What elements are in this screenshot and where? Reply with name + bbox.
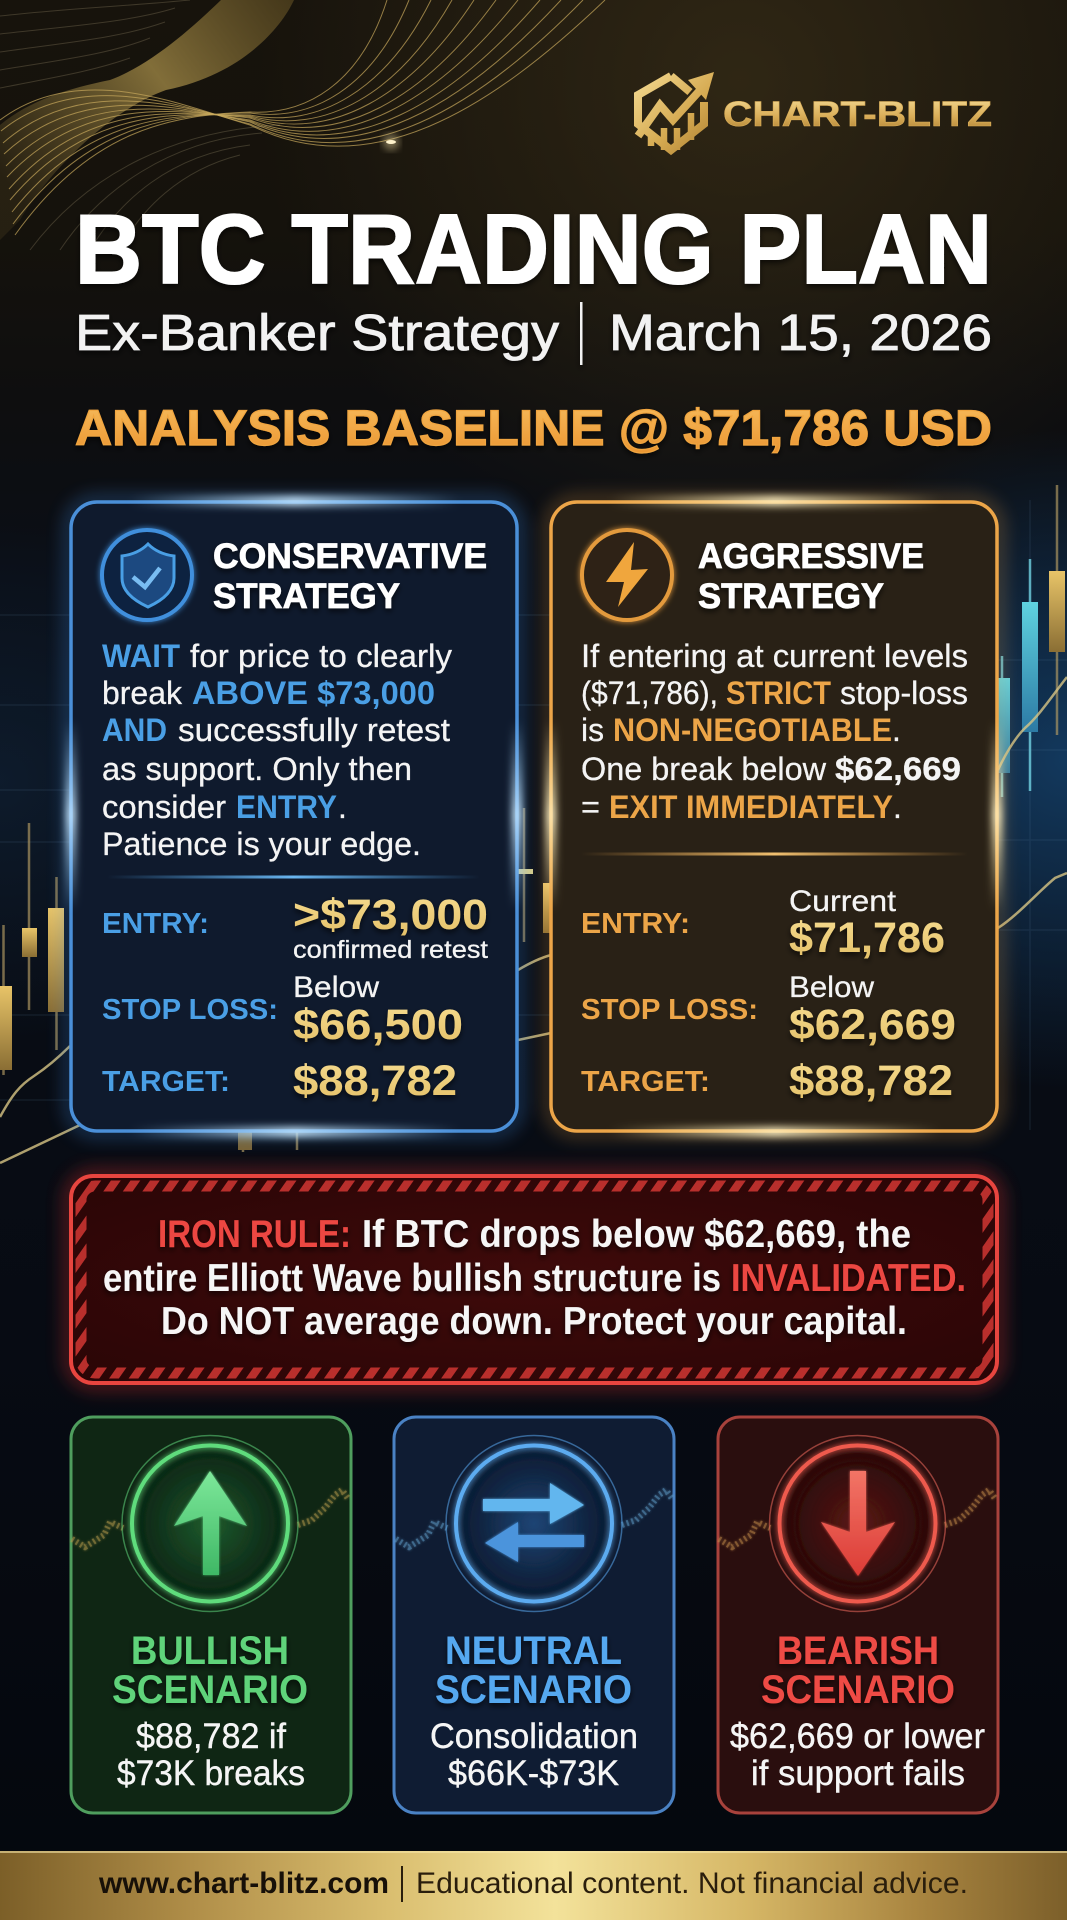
- body text: for price to clearly: [190, 638, 452, 674]
- panel: bearish scenario: [718, 1417, 998, 1813]
- heading: STRATEGY: [698, 577, 884, 616]
- panel: neutral scenario: [394, 1417, 674, 1813]
- description: [730, 1717, 985, 1793]
- decorative gold wave ribbons: [0, 0, 605, 250]
- description: $62,669 or lower: [730, 1717, 985, 1756]
- body text: Patience is your edge.: [102, 826, 421, 862]
- warning text: IRON RULE:: [158, 1213, 351, 1256]
- heading: STRATEGY: [213, 577, 400, 616]
- body text: ($71,786),: [581, 675, 718, 711]
- entry, stop loss, target rows: $66,500: [293, 1001, 463, 1049]
- body text: =: [581, 789, 600, 825]
- disclaimer: Educational content. Not financial advice.: [416, 1867, 968, 1900]
- icon: swap arrows in ring: [446, 1436, 622, 1612]
- label: [112, 1629, 308, 1712]
- entry, stop loss, target rows: ENTRY:: [102, 908, 209, 940]
- label: SCENARIO: [761, 1668, 955, 1712]
- label: BEARISH: [777, 1629, 939, 1673]
- panel: iron rule warning: [70, 1175, 998, 1384]
- title block: [75, 194, 992, 456]
- body text: .: [893, 789, 902, 825]
- mini chart: [72, 1490, 349, 1547]
- entry, stop loss, target rows: ENTRY:: [581, 908, 690, 940]
- panel: bullish scenario: [71, 1417, 351, 1813]
- heading: AGGRESSIVE: [698, 537, 924, 576]
- icon: up arrow in ring: [122, 1436, 298, 1612]
- entry, stop loss, target rows: [581, 885, 956, 1105]
- entry, stop loss, target rows: TARGET:: [581, 1066, 710, 1098]
- entry, stop loss, target rows: TARGET:: [102, 1066, 230, 1098]
- entry, stop loss, target rows: STOP LOSS:: [102, 994, 278, 1026]
- body text: EXIT IMMEDIATELY: [609, 789, 893, 825]
- body text: is: [581, 712, 604, 748]
- entry, stop loss, target rows: STOP LOSS:: [581, 994, 758, 1026]
- description: [117, 1717, 305, 1793]
- icon: down arrow in ring: [770, 1436, 946, 1612]
- label: [761, 1629, 955, 1712]
- panel: conservative strategy: [66, 496, 522, 1137]
- heading: CONSERVATIVE: [213, 537, 487, 576]
- panel: aggressive strategy: [546, 496, 1002, 1137]
- body text: [581, 638, 968, 825]
- title: BTC TRADING PLAN: [75, 194, 992, 304]
- entry, stop loss, target rows: $62,669: [789, 1001, 956, 1049]
- subtitle: March 15, 2026: [609, 304, 992, 361]
- description: [430, 1717, 638, 1793]
- icon: shield check: [102, 530, 192, 620]
- entry, stop loss, target rows: $88,782: [789, 1057, 953, 1105]
- description: $73K breaks: [117, 1754, 305, 1793]
- subtitle: Ex-Banker Strategy: [75, 304, 560, 361]
- icon: shield with rising arrow: [638, 72, 714, 150]
- label: SCENARIO: [435, 1668, 632, 1712]
- description: if support fails: [751, 1754, 965, 1793]
- body text: stop-loss: [840, 675, 968, 711]
- icon: lightning bolt: [582, 530, 672, 620]
- body text: ENTRY: [236, 789, 337, 825]
- body text: .: [338, 789, 347, 825]
- mini chart: [396, 1490, 673, 1547]
- entry, stop loss, target rows: $71,786: [789, 914, 945, 962]
- body text: [102, 638, 452, 862]
- label: NEUTRAL: [445, 1629, 622, 1673]
- entry, stop loss, target rows: $88,782: [293, 1057, 457, 1105]
- entry, stop loss, target rows: >$73,000: [293, 891, 488, 939]
- label: BULLISH: [131, 1629, 289, 1673]
- body text: If entering at current levels: [581, 638, 968, 674]
- logo wordmark: CHART-BLITZ: [723, 95, 992, 134]
- body text: .: [892, 712, 901, 748]
- body text: One break below: [581, 751, 827, 787]
- body text: break: [102, 675, 183, 711]
- warning text: Do NOT average down. Protect your capital.: [161, 1300, 907, 1343]
- heading: [213, 537, 487, 616]
- body text: STRICT: [726, 675, 831, 711]
- warning text: [103, 1213, 966, 1343]
- mini chart: [719, 1490, 996, 1547]
- body text: $62,669: [835, 751, 961, 787]
- warning text: entire Elliott Wave bullish structure is: [103, 1257, 721, 1300]
- label: [435, 1629, 632, 1712]
- logo: Chart-Blitz: [638, 72, 992, 150]
- description: $66K-$73K: [448, 1754, 619, 1793]
- background candlesticks and trend lines: [0, 485, 1067, 1163]
- body text: AND: [102, 712, 167, 748]
- label: SCENARIO: [112, 1668, 308, 1712]
- body text: successfully retest: [178, 712, 450, 748]
- warning text: If BTC drops below $62,669, the: [362, 1213, 911, 1256]
- entry, stop loss, target rows: Below: [789, 971, 874, 1004]
- footer band: [0, 1851, 1067, 1920]
- website link: www.chart-blitz.com: [98, 1867, 389, 1900]
- description: Consolidation: [430, 1717, 638, 1756]
- body text: ABOVE $73,000: [192, 675, 435, 711]
- entry, stop loss, target rows: Below: [293, 971, 379, 1004]
- entry, stop loss, target rows: Current: [789, 885, 897, 918]
- heading: [698, 537, 924, 616]
- body text: as support. Only then: [102, 751, 412, 787]
- description: $88,782 if: [136, 1717, 286, 1756]
- body text: NON-NEGOTIABLE: [613, 712, 892, 748]
- entry, stop loss, target rows: [102, 891, 488, 1105]
- body text: consider: [102, 789, 226, 825]
- subtitle: [75, 302, 992, 365]
- body text: WAIT: [102, 638, 180, 674]
- warning text: INVALIDATED.: [731, 1257, 966, 1300]
- analysis baseline: ANALYSIS BASELINE @ $71,786 USD: [75, 400, 992, 456]
- entry, stop loss, target rows: confirmed retest: [293, 936, 488, 964]
